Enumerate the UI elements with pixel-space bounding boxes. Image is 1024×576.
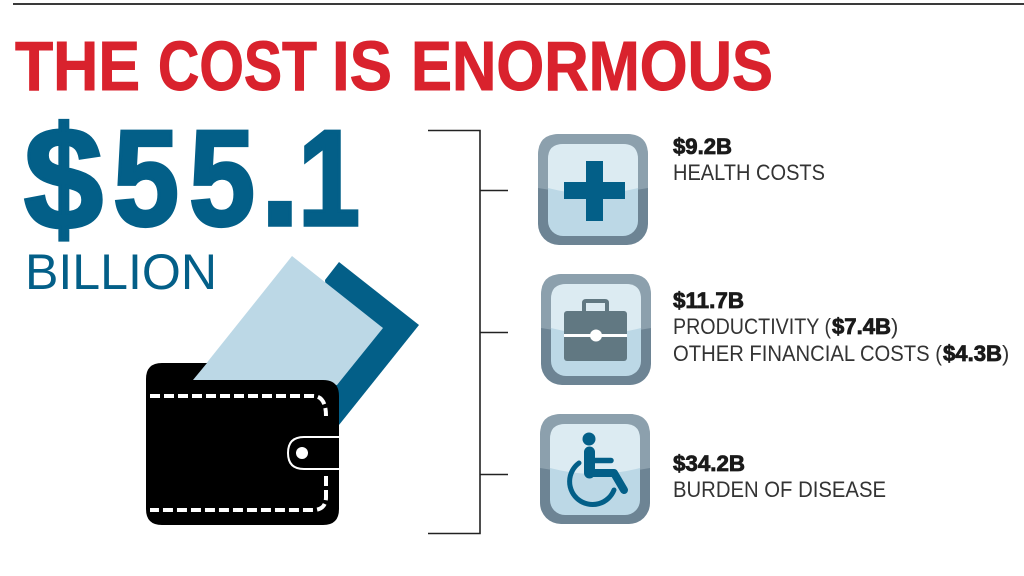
health costs text: HEALTH COSTS: [673, 160, 825, 185]
title: ENORMOUS: [411, 27, 773, 105]
icon: wallet with bills: [146, 256, 419, 525]
productivity and financial costs text: $7.4B: [832, 314, 891, 339]
productivity and financial costs text: PRODUCTIVITY (: [673, 314, 832, 339]
title: IS: [332, 27, 392, 105]
billion label: BILLION: [25, 244, 217, 300]
total amount: 5: [113, 102, 179, 254]
total amount: $: [24, 97, 103, 260]
burden of disease text: BURDEN OF DISEASE: [673, 477, 886, 502]
title: THE: [15, 27, 140, 105]
productivity and financial costs text: $4.3B: [943, 341, 1002, 366]
productivity and financial costs text: ): [1002, 341, 1009, 366]
burden of disease text: $34.2B: [673, 451, 745, 476]
health costs text: $9.2B: [673, 134, 732, 159]
total amount: .: [260, 89, 300, 257]
productivity and financial costs text: ): [891, 314, 898, 339]
title: [15, 27, 773, 105]
icon: briefcase: [541, 274, 651, 385]
productivity and financial costs text: OTHER FINANCIAL COSTS (: [673, 341, 943, 366]
total amount: 1: [298, 102, 360, 254]
icon: health cross: [538, 134, 648, 245]
total amount: [24, 89, 360, 260]
burden of disease text: [673, 451, 886, 502]
total amount: 5: [189, 102, 255, 254]
productivity and financial costs text: $11.7B: [673, 288, 744, 313]
bracket: [428, 130, 508, 534]
title: COST: [158, 27, 317, 105]
health costs text: [673, 134, 825, 185]
icon: wheelchair: [540, 414, 650, 524]
productivity and financial costs text: [673, 288, 1009, 366]
